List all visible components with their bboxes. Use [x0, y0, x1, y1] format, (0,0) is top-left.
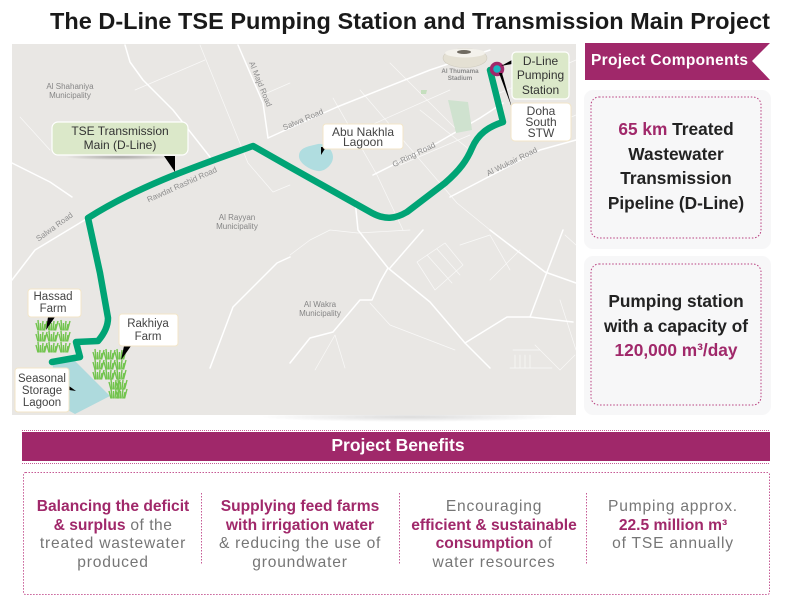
benefit: supplying: with irrigation water: [225, 517, 374, 534]
panel: pipeline component: [584, 90, 771, 249]
panel: benefits: [24, 472, 770, 594]
panel: pumping station component: Pumping station: [608, 291, 744, 311]
panel: pipeline component: Pipeline (D-Line): [608, 193, 744, 213]
label: Rakhiya Farm: Rakhiya: [127, 318, 169, 330]
heading bar: Project Benefits: [22, 430, 770, 464]
panel: pumping station component: with a capacity of: [603, 316, 748, 336]
road labels: Rawdat Rashid Road: [146, 165, 218, 204]
label: Seasonal Storage Lagoon: [15, 368, 76, 412]
label: Rakhiya Farm: Farm: [135, 331, 161, 343]
municipality labels: Al Shahaniya: [46, 82, 94, 91]
benefit: pumping: Pumping approx.: [608, 498, 738, 515]
Hassad farm grass: [36, 320, 70, 352]
label: Abu Nakhla Lagoon: [321, 124, 403, 155]
label: TSE Transmission Main: [52, 122, 188, 172]
label: D-Line Pumping Station: Pumping: [517, 68, 564, 82]
panel: pumping station component: [584, 256, 771, 415]
label: Seasonal Storage Lagoon: Seasonal: [18, 373, 66, 385]
benefit: pumping: of TSE annually: [612, 535, 734, 552]
benefit: balancing: treated wastewater: [40, 535, 186, 552]
benefit: supplying: [219, 498, 381, 571]
benefit: supplying: groundwater: [252, 554, 348, 571]
label: Hassad Farm: Farm: [40, 303, 66, 315]
road labels: [34, 60, 539, 243]
icon: Al Thumama Stadium: [441, 48, 487, 82]
benefit: encouraging: water resources: [432, 554, 555, 571]
label: Rakhiya Farm: [119, 314, 178, 360]
municipality labels: Al Wakra: [304, 300, 337, 309]
road labels: Salwa Road: [281, 107, 325, 132]
benefit: balancing: Balancing the deficit: [37, 498, 189, 515]
municipality labels: Municipality: [216, 222, 258, 231]
label: Doha South STW: Doha: [527, 104, 556, 118]
label: Doha South STW: [499, 73, 571, 141]
panel: pipeline component: Transmission: [620, 168, 732, 188]
Abu Nakhla lagoon: [299, 144, 333, 171]
road labels: Al Wukair Road: [485, 146, 539, 178]
benefit: balancing: & surplus of the: [54, 517, 172, 534]
panel: pumping station component: 120,000 m³/day: [615, 340, 738, 360]
panel: pipeline component: 65 km Treated: [618, 119, 734, 139]
benefit: pumping: [608, 498, 738, 552]
pumping station marker: [492, 64, 502, 74]
label: D-Line Pumping Station: [501, 52, 569, 99]
municipality labels: Municipality: [299, 309, 341, 318]
label: D-Line Pumping Station: Station: [522, 83, 559, 97]
map shadow: [260, 412, 560, 422]
transmission pipeline: [52, 70, 503, 362]
icon: Al Thumama Stadium: Stadium: [448, 75, 473, 82]
road labels: G-Ring Road: [391, 140, 437, 169]
municipality labels: [46, 82, 341, 318]
urban blocks: [448, 100, 472, 133]
label: Hassad Farm: Hassad: [34, 291, 72, 303]
municipality labels: Al Rayyan: [219, 213, 255, 222]
panel: pipeline component: Wastewater: [628, 144, 724, 164]
label: Abu Nakhla Lagoon: Lagoon: [343, 135, 383, 149]
municipality labels: Municipality: [49, 91, 91, 100]
benefit: balancing: [37, 498, 189, 571]
icon: Al Thumama Stadium: Al Thumama: [441, 68, 479, 75]
road labels: Al Majd Road: [247, 60, 273, 108]
label: Seasonal Storage Lagoon: Lagoon: [23, 397, 61, 409]
benefit: balancing: produced: [77, 554, 149, 571]
benefit: supplying: & reducing the use of: [219, 535, 381, 552]
heading banner: Project Components: Project Components: [591, 52, 748, 69]
benefit: encouraging: consumption of: [436, 535, 553, 552]
seasonal storage lagoon: [50, 361, 110, 414]
title: The D-Line TSE Pumping Station and Transmission Main Project: [50, 8, 770, 34]
benefit: encouraging: [411, 498, 577, 571]
road network: [12, 45, 576, 370]
road labels: Salwa Road: [34, 211, 75, 243]
benefit: encouraging: efficient & sustainable: [411, 517, 577, 534]
map panel: [12, 44, 576, 422]
label: D-Line Pumping Station: D-Line: [523, 54, 558, 68]
benefit: supplying: Supplying feed farms: [221, 498, 380, 515]
heading bar: Project Benefits: Project Benefits: [331, 435, 465, 455]
Rakhiya farm grass: [93, 349, 127, 398]
benefit: encouraging: Encouraging: [446, 498, 542, 515]
label: Doha South STW: South: [525, 115, 557, 129]
label: Abu Nakhla Lagoon: Abu Nakhla: [332, 125, 394, 139]
label: TSE Transmission Main: TSE Transmission: [71, 124, 169, 138]
label: Seasonal Storage Lagoon: Storage: [22, 385, 62, 397]
label: TSE Transmission Main: Main (D-Line): [84, 138, 156, 152]
label: Doha South STW: STW: [528, 126, 555, 140]
label: Hassad Farm: [28, 289, 81, 330]
heading banner: Project Components: [585, 43, 770, 80]
benefit: pumping: 22.5 million m³: [619, 517, 727, 534]
